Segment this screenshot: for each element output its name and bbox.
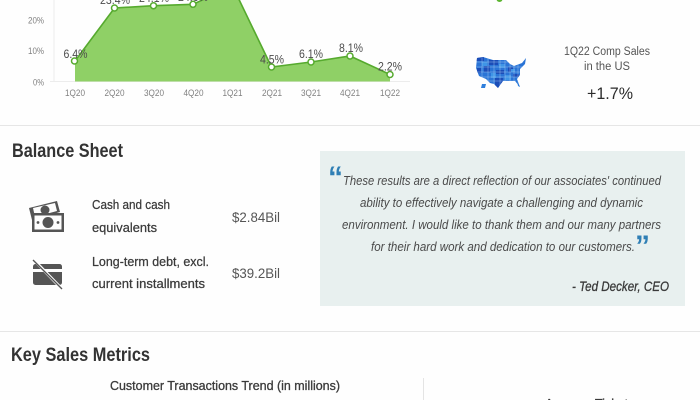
US comp sales label: +1.7%	[587, 84, 633, 103]
x axis labels	[65, 88, 400, 99]
data points	[72, 1, 393, 77]
quote text: environment. I would like to thank them and our many partners	[342, 217, 661, 232]
US comp sales label: in the US	[584, 61, 630, 73]
x axis labels: 4Q20	[184, 88, 204, 99]
data labels: 2.2%	[378, 60, 402, 74]
icon: closing quote mark: ”	[635, 230, 650, 263]
green area	[75, 0, 390, 82]
area chart: comp sales trend	[28, 0, 410, 99]
x axis labels: 2Q21	[262, 88, 282, 99]
y axis labels	[28, 16, 44, 88]
y axis labels: 10%	[28, 46, 44, 57]
x axis labels: 1Q22	[380, 88, 400, 99]
x axis labels: 2Q20	[104, 88, 124, 99]
icon: crossed credit card	[33, 259, 62, 289]
quote text: for their hard work and dedication to our customers.	[371, 239, 635, 254]
balance sheet row: cash: Cash and cash	[92, 197, 170, 212]
US comp sales label	[564, 46, 650, 103]
x axis labels: 1Q20	[65, 88, 85, 99]
x axis labels: 1Q21	[222, 88, 242, 99]
balance sheet row: debt: Long-term debt, excl.	[92, 254, 209, 269]
axis grid	[50, 0, 410, 82]
data labels: 8.1%	[339, 41, 363, 55]
panel: CEO quote	[320, 151, 685, 306]
quote text	[342, 173, 662, 254]
US comp sales label: 1Q22 Comp Sales	[564, 46, 650, 58]
green line	[75, 0, 390, 74]
icon: clipped green mark at top	[496, 0, 502, 2]
icon: cash	[29, 201, 64, 232]
heading: Balance Sheet: Balance Sheet	[12, 141, 124, 162]
quote text: ability to effectively navigate a challenging and dynamic	[360, 195, 643, 210]
y axis labels: 20%	[28, 16, 44, 26]
data labels: 4.5%	[260, 52, 284, 66]
x axis labels: 3Q21	[301, 88, 321, 99]
balance sheet row: cash	[29, 197, 280, 235]
section divider lines	[0, 125, 700, 400]
icon: opening quote mark: “	[328, 161, 343, 194]
data labels: 6.1%	[299, 47, 323, 61]
quote text: These results are a direct reflection of our associates' continued	[343, 173, 662, 188]
balance sheet row: cash: $2.84Bil	[232, 209, 280, 225]
data labels: 6.4%	[64, 47, 88, 61]
y axis labels: 0%	[33, 78, 44, 88]
balance sheet row: debt: $39.2Bil	[232, 265, 280, 281]
chart title: customer transactions: Customer Transactions Trend (in millions)	[110, 378, 340, 393]
balance sheet row: debt: current installments	[92, 276, 205, 291]
balance sheet row: debt	[33, 254, 280, 291]
heading: Key Sales Metrics: Key Sales Metrics	[11, 345, 150, 366]
icon: Alaska and Hawaii	[481, 81, 520, 88]
icon: US map	[476, 57, 526, 88]
attribution: - Ted Decker, CEO	[572, 278, 669, 294]
x axis labels: 4Q21	[340, 88, 360, 99]
x axis labels: 3Q20	[144, 88, 164, 99]
balance sheet row: cash: equivalents	[92, 220, 157, 235]
data labels	[64, 0, 402, 74]
